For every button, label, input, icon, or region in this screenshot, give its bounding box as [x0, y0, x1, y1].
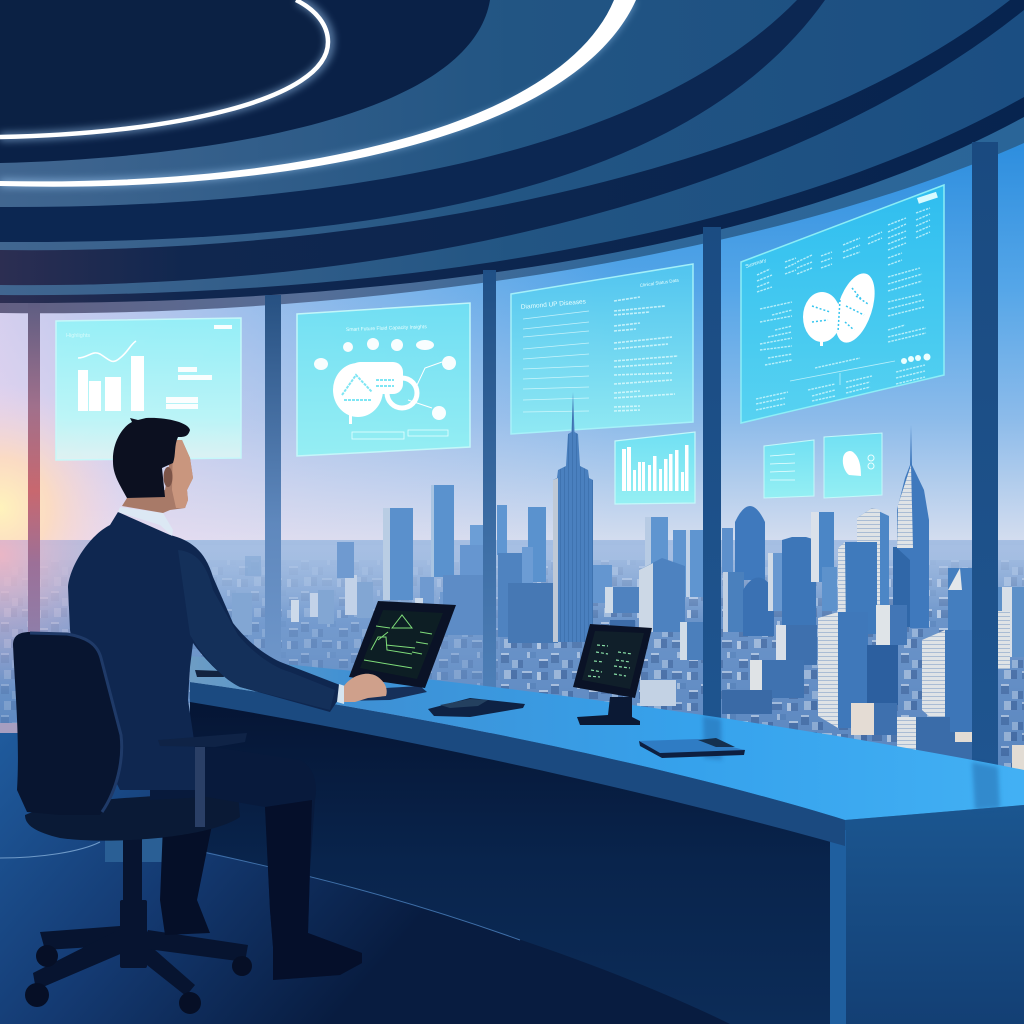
panel 3 right text lines	[614, 297, 678, 411]
city: horizon fade	[0, 545, 1024, 620]
small holographic chart panel	[615, 432, 695, 504]
shin shadow and shoe	[265, 800, 362, 980]
background: sky through windows	[0, 130, 1024, 550]
chair legs	[33, 838, 248, 996]
chair wheels	[25, 945, 252, 1014]
panel 4 icon row	[901, 354, 930, 364]
city skyline	[0, 425, 1024, 790]
panel 4 heading: Summary	[745, 257, 767, 270]
armrest post	[195, 747, 205, 827]
man in suit	[68, 418, 387, 980]
city: centre blocks	[498, 517, 703, 706]
city: far towers left	[232, 542, 460, 635]
pillar reflections on desk	[703, 716, 1000, 810]
hair	[113, 418, 190, 498]
torso and arm	[68, 512, 340, 790]
holographic panel 2: diagram	[297, 303, 470, 456]
desk	[105, 656, 1024, 1024]
small holographic panel: list	[764, 440, 814, 498]
panel 2 central diagram	[333, 362, 417, 424]
panel 1 heading: Highlights	[66, 333, 90, 339]
panel 4 text columns	[756, 208, 930, 410]
chair armrest	[158, 733, 247, 747]
desk front	[190, 690, 845, 1024]
city: right town texture	[500, 560, 1024, 790]
panel 3 sub heading: Clinical Status Data	[639, 278, 680, 288]
panel 2 footer rows	[352, 430, 448, 439]
panel 4 central organ graphic	[803, 269, 882, 347]
desk skirting line	[203, 852, 520, 940]
panel 1 bars	[78, 356, 144, 411]
panel 2 heading: Smart Future Fluid Capacity Insights	[346, 324, 427, 333]
small holographic panel: profile	[824, 433, 882, 498]
laptop screen	[360, 610, 443, 679]
city: right towers	[722, 425, 1024, 669]
front leg	[150, 747, 362, 980]
city: pink sunset tint	[0, 540, 140, 700]
city: left town texture	[0, 560, 500, 790]
face front	[172, 440, 193, 508]
landmark tower with spire	[553, 392, 593, 642]
window pillars and sill	[0, 142, 998, 770]
laptop	[340, 601, 456, 701]
desk plinth at floor	[105, 838, 195, 862]
chair backrest	[13, 632, 123, 815]
ceiling	[0, 0, 1024, 313]
neck and face	[122, 440, 193, 513]
city: mid towers	[383, 485, 546, 635]
city: haze band	[0, 540, 1024, 790]
desk item behind arm	[195, 670, 224, 677]
desk tablet 1	[428, 698, 525, 717]
ceiling: inner light ring	[0, 0, 330, 137]
desk right block	[845, 805, 1024, 1024]
holographic panel 3: text lists	[511, 264, 693, 434]
desk tablet 2	[639, 738, 745, 758]
stand monitor	[573, 624, 652, 725]
panel 3 heading: Diamond UP Diseases	[521, 298, 587, 311]
office chair backrest and armrest	[13, 632, 247, 827]
holographic panel 4: organ diagram and text	[741, 185, 944, 423]
shirt collar	[118, 507, 173, 536]
ceiling: outer light ring	[0, 0, 636, 187]
arm highlight	[178, 550, 335, 710]
desk fascia	[190, 682, 845, 846]
floor cable	[0, 842, 100, 858]
ear	[164, 467, 172, 487]
panel 1 trend line	[78, 341, 136, 361]
panel 1 side bars	[166, 325, 232, 409]
stand monitor screen	[582, 631, 644, 689]
desk top surface	[190, 656, 1024, 820]
backrest edge highlight	[30, 633, 122, 812]
chair seat	[25, 793, 240, 841]
office chair base	[25, 838, 252, 1014]
holographic panel 1: bar chart	[56, 318, 241, 460]
floor	[0, 733, 760, 1024]
city: near buildings	[722, 605, 1024, 775]
cuff and hand	[337, 674, 387, 704]
panel 2 diagram nodes	[314, 338, 456, 420]
panel 3 left rule lines	[523, 311, 589, 412]
man: back leg	[160, 825, 212, 935]
